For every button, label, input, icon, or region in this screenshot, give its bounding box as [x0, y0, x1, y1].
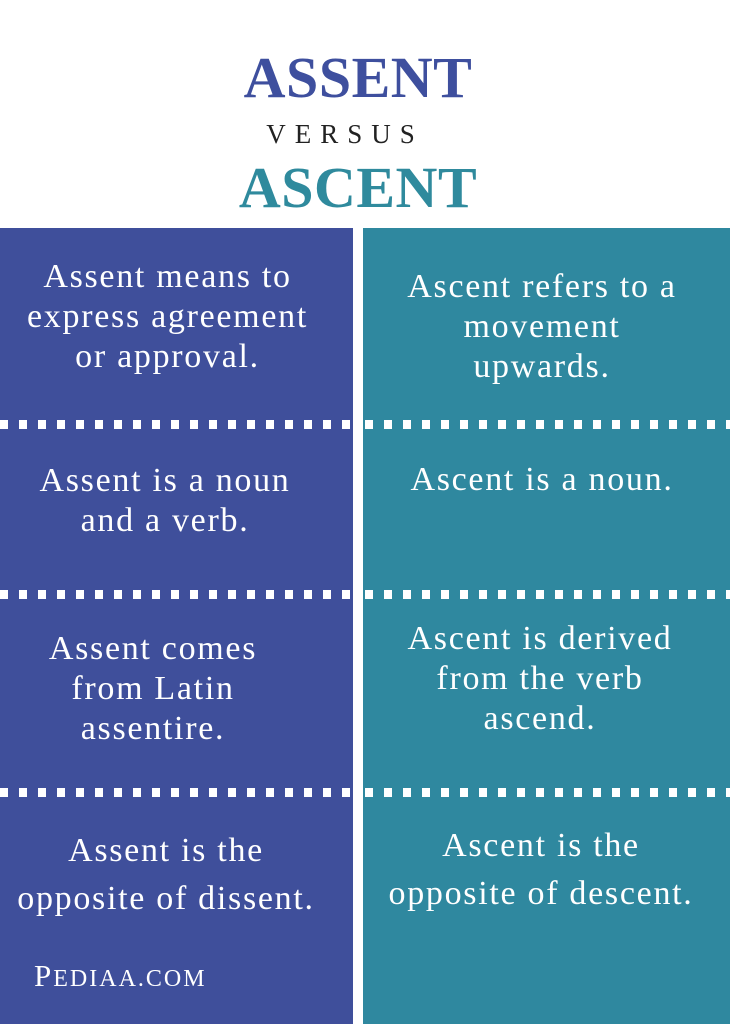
text: part of speech: Assent is a noun [39, 462, 291, 499]
logo: pediaa.com: PEDIAA.COM [34, 958, 207, 993]
text: meaning: Assent means to [43, 258, 292, 295]
title: ascent: ASCENT [239, 155, 477, 220]
text: meaning: or approval. [75, 338, 260, 375]
panel: ascent [363, 228, 730, 1024]
text: meaning: upwards. [473, 348, 611, 385]
text: part of speech: Ascent is a noun. [410, 461, 674, 498]
text: opposite [388, 827, 694, 912]
text: origin: from the verb [436, 660, 644, 697]
text: meaning: movement [463, 308, 621, 345]
panel: assent [0, 228, 353, 1024]
text: meaning: Ascent refers to a [407, 268, 677, 305]
title: assent: ASSENT [244, 45, 472, 110]
text: opposite: Ascent is the [442, 827, 640, 864]
text: opposite: opposite of descent. [388, 875, 694, 912]
text: origin: Ascent is derived [408, 620, 672, 657]
text: origin: assentire. [81, 710, 225, 747]
text: meaning [407, 268, 677, 385]
text: opposite [17, 832, 315, 917]
text: opposite: opposite of dissent. [17, 880, 315, 917]
text: origin: from Latin [71, 670, 235, 707]
text: meaning [27, 258, 308, 375]
text: origin [408, 620, 672, 737]
text: part of speech [39, 462, 291, 539]
text: origin [49, 630, 257, 747]
text: origin: Assent comes [49, 630, 257, 667]
text: origin: ascend. [484, 700, 596, 737]
subtitle: versus: VERSUS [266, 119, 424, 149]
text: opposite: Assent is the [68, 832, 264, 869]
text: meaning: express agreement [27, 298, 308, 335]
text: part of speech: and a verb. [81, 502, 249, 539]
